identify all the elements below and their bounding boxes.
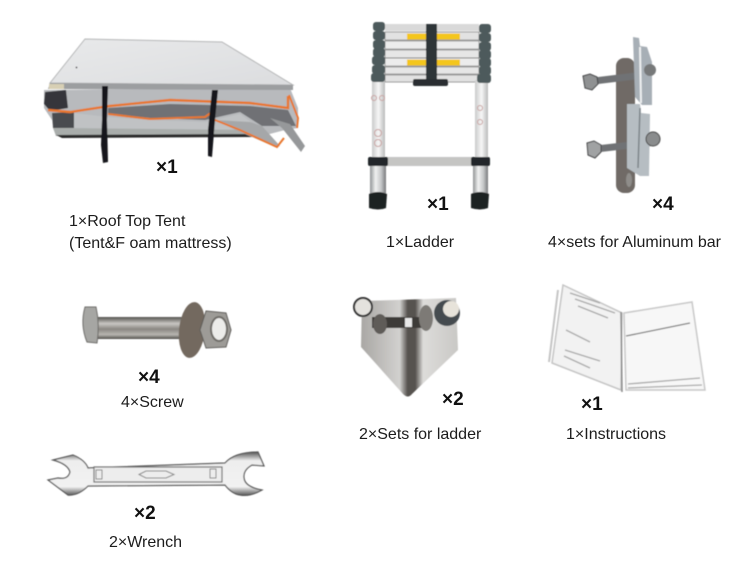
quantity: aluminum bar: ×4 xyxy=(652,194,674,215)
mount plate xyxy=(361,298,458,396)
caption: instructions: 1×Instructions xyxy=(566,426,666,443)
screw washer xyxy=(176,301,208,359)
mount washer xyxy=(419,305,433,331)
booklet right page xyxy=(624,302,705,390)
caption: ladder: 1×Ladder xyxy=(386,234,455,251)
wrench outline xyxy=(48,452,264,495)
bracket channels xyxy=(633,37,652,105)
caption: screw: 4×Screw xyxy=(121,394,184,411)
ladder handle xyxy=(413,79,448,86)
quantity: tent: ×1 xyxy=(156,157,178,178)
quantity: instructions: ×1 xyxy=(581,394,603,415)
screw nut xyxy=(200,311,231,348)
booklet text lines xyxy=(564,293,702,388)
mount bolt right xyxy=(434,300,460,326)
quantity: wrench: ×2 xyxy=(134,503,156,524)
booklet left page xyxy=(552,285,622,390)
icon: wrench xyxy=(48,452,264,495)
tent hard top xyxy=(50,39,293,85)
tent top frame xyxy=(48,83,293,90)
wrench marks xyxy=(139,471,174,478)
quantity: ladder: ×1 xyxy=(427,194,449,215)
ladder right upper rail xyxy=(475,80,488,158)
screw shank xyxy=(98,317,198,339)
orange piping xyxy=(48,96,288,112)
mount bolt left xyxy=(354,298,372,316)
wrench inner groove xyxy=(94,467,222,482)
ladder bottom rung xyxy=(386,157,474,166)
icon: aluminum bar bracket xyxy=(583,37,660,193)
screw head xyxy=(83,307,98,343)
bracket plate xyxy=(616,58,635,193)
icon: ladder mounting set xyxy=(354,298,460,396)
ladder right collars xyxy=(477,24,491,83)
tent strap left xyxy=(101,86,108,163)
booklet spine xyxy=(621,312,622,392)
icon: telescopic ladder xyxy=(368,22,491,210)
quantity: screw: ×4 xyxy=(138,367,160,388)
tent flap xyxy=(215,120,280,147)
ladder rungs xyxy=(385,24,479,82)
ladder warning marks xyxy=(372,96,482,146)
caption: ladder set: 2×Sets for ladder xyxy=(359,426,482,443)
ladder centre strap xyxy=(426,24,437,80)
mount rod xyxy=(372,317,428,328)
quantity: ladder set: ×2 xyxy=(442,389,464,410)
caption: wrench: 2×Wrench xyxy=(109,534,182,551)
tent base frame xyxy=(53,128,258,136)
ladder lower collars xyxy=(368,157,388,166)
caption: aluminum bar: 4×sets for Aluminum bar xyxy=(548,234,722,251)
caption: tent: 1×Roof Top Tent xyxy=(69,213,185,230)
ladder left upper rail xyxy=(372,80,385,158)
tent body fabric xyxy=(44,88,298,136)
bracket bolts xyxy=(590,72,640,85)
caption: tent: (Tent&F oam mattress) xyxy=(69,235,232,252)
ladder left collars xyxy=(371,22,385,82)
icon: instruction booklet xyxy=(549,285,705,392)
ladder feet xyxy=(369,192,387,210)
bracket nuts xyxy=(644,64,656,76)
ladder lower legs xyxy=(370,165,386,195)
icon: screw xyxy=(83,301,231,359)
tent dark corner xyxy=(44,90,68,111)
icon: roof top tent xyxy=(44,39,305,163)
folded interior xyxy=(108,104,296,126)
lower fabric xyxy=(73,113,262,130)
tent strap right xyxy=(208,90,218,157)
